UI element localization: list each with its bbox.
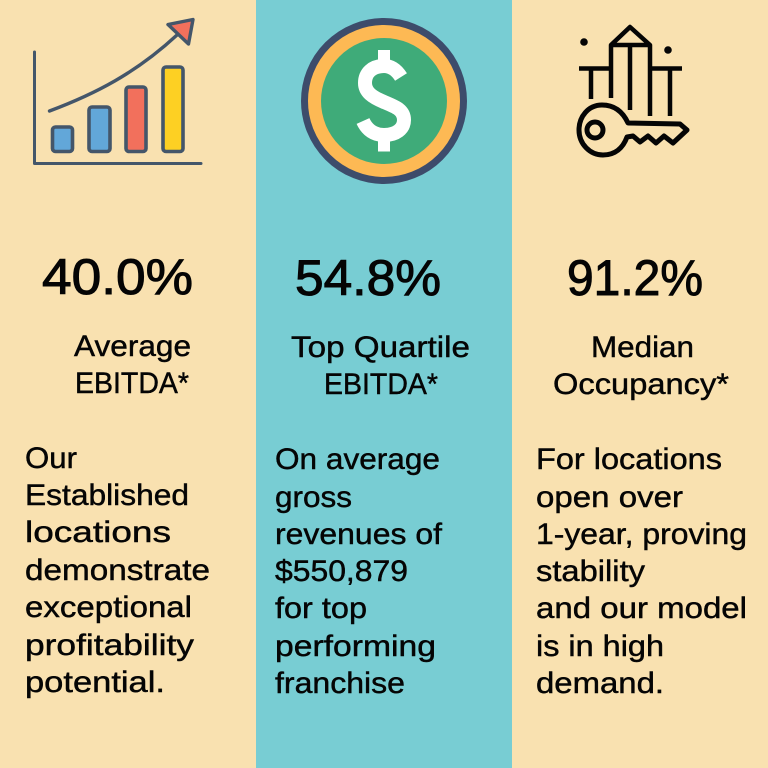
key hole bbox=[587, 122, 603, 138]
description text: $550,879 bbox=[275, 555, 408, 588]
description text: Established bbox=[25, 479, 189, 512]
icon: building and key bbox=[579, 27, 687, 155]
description text: franchise bbox=[275, 667, 405, 700]
bar 2 bbox=[89, 107, 110, 152]
label: Average EBITDA: Average bbox=[74, 330, 191, 363]
panel: top quartile column bbox=[275, 22, 470, 700]
coin outer ring bbox=[304, 22, 464, 180]
panel: centre column bbox=[256, 0, 512, 768]
description text: gross bbox=[275, 481, 352, 514]
panel: median occupancy column bbox=[536, 27, 755, 700]
description text: for top bbox=[275, 592, 367, 625]
icon: dollar coin bbox=[304, 22, 464, 180]
icon: rising bar chart bbox=[34, 20, 201, 164]
label: Top Quartile EBITDA: Top Quartile bbox=[291, 331, 470, 364]
arrow shaft bbox=[50, 35, 177, 111]
bar 1 bbox=[52, 127, 72, 152]
description text: stability bbox=[536, 555, 645, 588]
label: Average EBITDA: EBITDA* bbox=[75, 367, 189, 400]
description text: revenues of bbox=[275, 518, 443, 551]
statistic: 91.2%: 91.2% bbox=[567, 250, 703, 306]
tower and rails bbox=[579, 27, 682, 116]
description text: demand. bbox=[536, 667, 664, 700]
label: Median Occupancy: Median bbox=[591, 331, 694, 364]
bar 4 bbox=[163, 67, 183, 152]
description text: potential. bbox=[25, 666, 165, 699]
description text: is in high bbox=[536, 630, 664, 663]
statistic: 40.0%: 40.0% bbox=[42, 249, 193, 305]
description text: locations bbox=[25, 516, 171, 549]
description text: On average bbox=[275, 443, 440, 476]
description text: and our model bbox=[536, 592, 747, 625]
panel: average EBITDA column bbox=[25, 20, 218, 699]
statistic: 54.8%: 54.8% bbox=[295, 250, 441, 306]
description text: Our bbox=[25, 442, 77, 475]
bar 3 bbox=[126, 87, 146, 152]
label: Median Occupancy: Occupancy* bbox=[553, 368, 729, 401]
label: Top Quartile EBITDA: EBITDA* bbox=[324, 368, 438, 401]
dots bbox=[580, 38, 672, 54]
description text: performing bbox=[275, 630, 436, 663]
description text: profitability bbox=[25, 629, 194, 662]
description text: exceptional bbox=[25, 591, 192, 624]
description text: 1-year, proving bbox=[536, 518, 747, 551]
description text: For locations bbox=[536, 443, 722, 476]
description text: demonstrate bbox=[25, 554, 210, 587]
coin centre bbox=[321, 38, 447, 164]
dollar sign bbox=[363, 50, 404, 152]
arrow head bbox=[168, 20, 193, 44]
description text: open over bbox=[536, 481, 683, 514]
chart axes bbox=[34, 52, 201, 164]
key bbox=[579, 105, 687, 155]
